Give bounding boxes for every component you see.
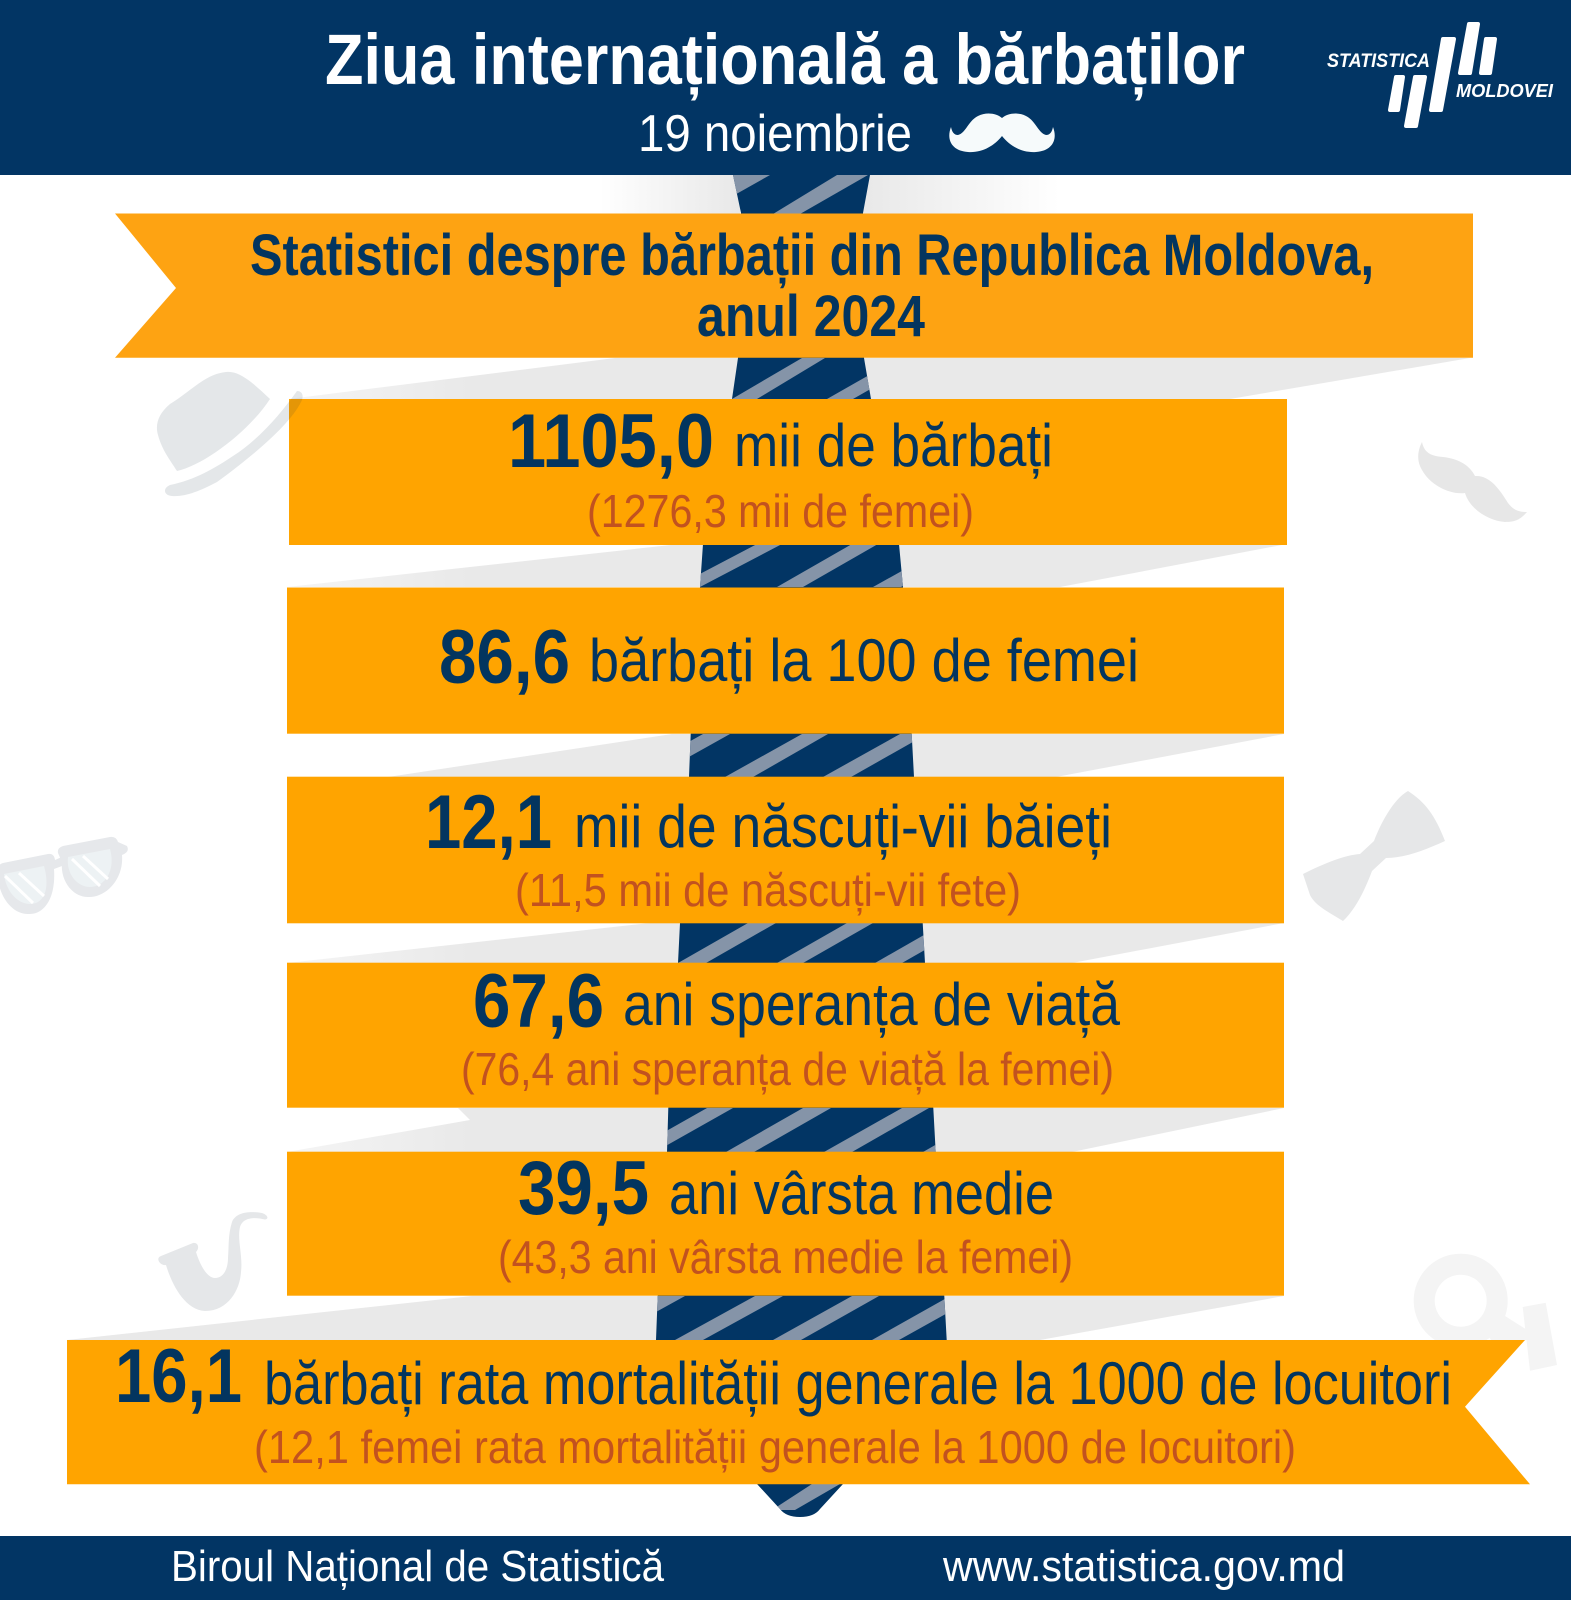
stat box: men population bbox=[289, 399, 1287, 545]
stat box: life expectancy: ani speranța de viață bbox=[623, 971, 1121, 1038]
top ribbon banner bbox=[115, 214, 1473, 358]
icon: pipe bbox=[158, 1212, 267, 1311]
stat box: life expectancy: 67,6 bbox=[473, 959, 604, 1044]
icon: male symbol bbox=[1414, 1254, 1557, 1371]
stat box: men population: mii de bărbați bbox=[734, 412, 1053, 479]
footer website: www.statistica.gov.md bbox=[942, 1542, 1345, 1591]
header band bbox=[0, 0, 1571, 175]
bottom ribbon banner: mortality bbox=[67, 1334, 1530, 1484]
stat box: median age: (43,3 ani vârsta medie la femei) bbox=[498, 1231, 1073, 1283]
stat box: live births: 12,1 bbox=[425, 780, 552, 865]
stat box: median age: 39,5 bbox=[518, 1146, 649, 1231]
bottom ribbon banner: mortality: 16,1 bbox=[115, 1334, 242, 1419]
logo: Statistica Moldovei: STATISTICA bbox=[1327, 51, 1430, 72]
banner heading: Statistici despre bărbații din Republica Moldova, bbox=[250, 223, 1374, 289]
background shadows behind tie bbox=[67, 175, 1470, 1340]
stat box: life expectancy bbox=[287, 959, 1284, 1108]
stat box: life expectancy: (76,4 ani speranța de viață la femei) bbox=[461, 1043, 1114, 1095]
stat box: live births: mii de născuți-vii băieți bbox=[574, 793, 1112, 860]
footer organisation name: Biroul Național de Statistică bbox=[171, 1542, 664, 1591]
stat box: sex ratio: 86,6 bbox=[439, 615, 570, 700]
icon: hat bbox=[157, 372, 303, 496]
stat box: median age: ani vârsta medie bbox=[669, 1160, 1054, 1227]
stat box: live births bbox=[287, 777, 1284, 923]
icon: white moustache bbox=[949, 114, 1055, 152]
date: 19 noiembrie bbox=[638, 105, 912, 163]
icon: glasses bbox=[0, 837, 128, 914]
stat box: live births: (11,5 mii de născuți-vii fete) bbox=[515, 864, 1021, 916]
footer band bbox=[0, 1536, 1571, 1600]
top ribbon banner: anul 2024 bbox=[697, 284, 925, 349]
stat box: men population: (1276,3 mii de femei) bbox=[587, 485, 974, 537]
stat box: sex ratio bbox=[287, 588, 1284, 734]
icon: bow tie bbox=[1303, 791, 1445, 921]
stat box: sex ratio: bărbați la 100 de femei bbox=[589, 627, 1139, 694]
title: Ziua internațională a bărbaților bbox=[325, 21, 1245, 100]
necktie with diagonal stripes bbox=[656, 175, 947, 1517]
logo: Statistica Moldovei bbox=[1327, 24, 1554, 126]
stat box: men population: 1105,0 bbox=[508, 399, 714, 484]
bottom ribbon banner: mortality: (12,1 femei rata mortalității generale la 1000 de locuitori) bbox=[254, 1421, 1296, 1473]
logo: Statistica Moldovei: MOLDOVEI bbox=[1456, 81, 1554, 101]
icon: grey moustache bbox=[1418, 442, 1527, 522]
stat box: median age bbox=[287, 1146, 1284, 1296]
